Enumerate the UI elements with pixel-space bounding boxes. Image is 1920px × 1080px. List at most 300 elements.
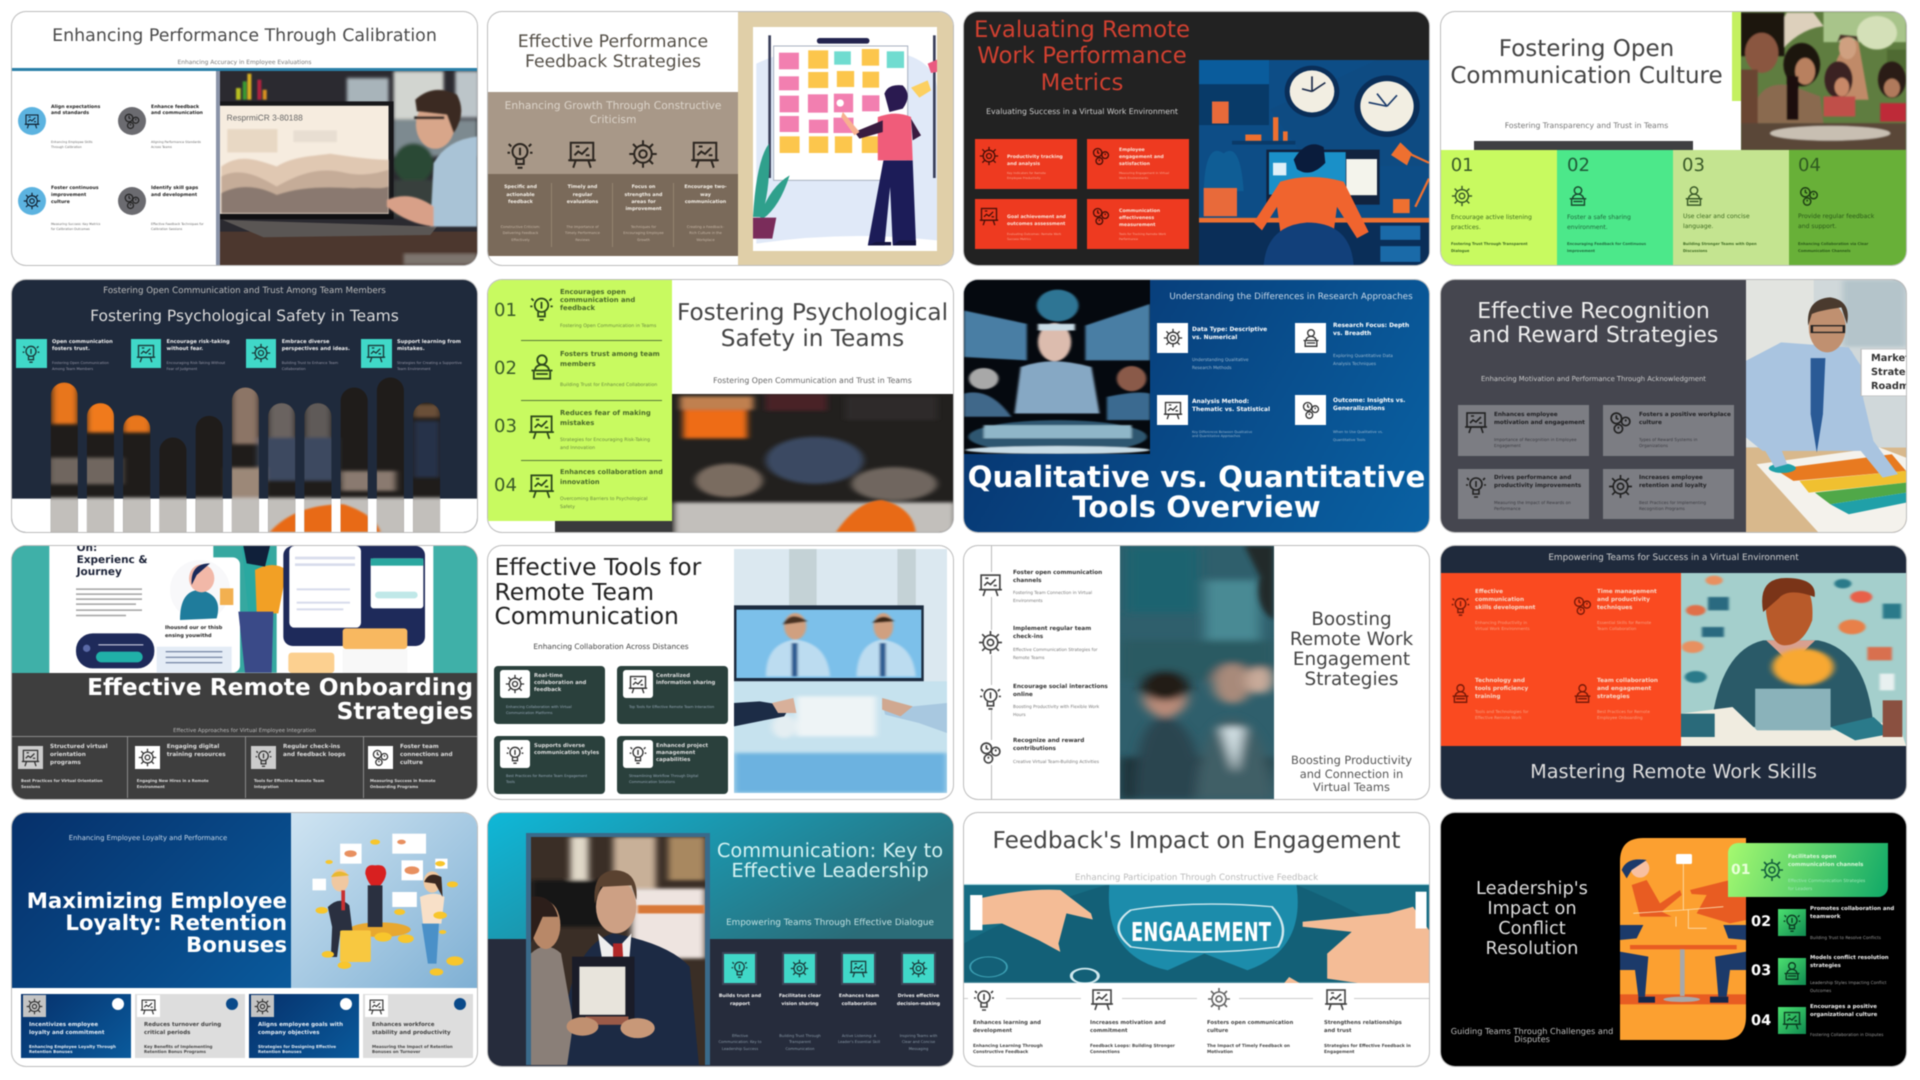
card: Communication Key to Effective Leadership — [488, 813, 953, 1066]
item: foster improvement — [17, 184, 101, 230]
item: enhance feedback: Across Teams — [151, 144, 172, 148]
item: orientation: programs — [50, 760, 81, 766]
item 04: 04 — [1751, 1013, 1771, 1029]
subtitle: Enhancing Employee Loyalty and Performance — [69, 834, 227, 842]
item: outcome — [1295, 395, 1425, 445]
card: Mastering Remote Work Skills — [1441, 546, 1906, 799]
column: 02: Foster a safe sharing — [1567, 214, 1631, 221]
title: Safety in Teams — [721, 325, 904, 352]
item: timely evaluations: regular — [573, 193, 592, 198]
item: enhance feedback: Aligning Performance Standards — [151, 140, 201, 144]
item: check-ins: Regular check-ins — [283, 744, 340, 750]
item: foster improvement: for Calibration Outcomes — [51, 226, 90, 230]
box: performance — [1458, 469, 1589, 519]
item 04: organizational culture — [1810, 1012, 1877, 1018]
item: analysis method: Analysis Method: — [1192, 399, 1249, 405]
card: workforce stability: Enhances workforce — [372, 1022, 434, 1028]
item 03: 03 — [494, 416, 517, 437]
icon — [246, 339, 276, 368]
subtitle: Fostering Open Communication and Trust Among Team Members — [103, 286, 386, 296]
icon: blue circle — [17, 106, 47, 136]
item: align expectations — [17, 104, 101, 149]
box: real-time: Real-time — [534, 672, 563, 678]
item: social interactions: online — [1013, 692, 1033, 698]
box: communication styles: Tools — [506, 780, 515, 784]
box: communication: Performance — [1119, 236, 1138, 240]
item: recognize contributions: Recognize and reward — [1013, 738, 1084, 744]
illustration caption: ensing youwithd — [165, 632, 212, 638]
title: Tools Overview — [1072, 490, 1321, 524]
item: open communication: Fostering Open Communication — [52, 361, 109, 365]
icon — [365, 995, 388, 1017]
title — [707, 841, 953, 882]
item: open communication: The Impact of Timely Feedback on — [1207, 1044, 1290, 1049]
item: data type: Research Methods — [1192, 366, 1231, 371]
box: retention — [1603, 469, 1734, 519]
column: 02: Improvement — [1567, 249, 1595, 253]
image: engagement hands — [964, 884, 1429, 983]
subtitle: Empowering Teams for Success in a Virtual Environment — [1548, 553, 1799, 563]
card: aligns goals: Aligns employee goals with — [258, 1022, 343, 1028]
box: retention: retention and loyalty — [1639, 482, 1707, 488]
box: retention: Recognition Programs — [1639, 506, 1685, 511]
box: culture — [1603, 405, 1734, 456]
item: trust: Effective — [732, 1034, 748, 1038]
item: social interactions: Boosting Productivity with Flexible Work — [1013, 705, 1099, 710]
icon — [18, 746, 43, 769]
card: Effective Tools for Remote Team Communication — [488, 546, 953, 799]
item: align expectations: and standards — [51, 111, 89, 116]
card: Fostering Psychological Safety (strips) — [12, 280, 477, 532]
icon — [530, 296, 554, 322]
box: engagement: engagement and — [1119, 155, 1164, 160]
box: motivation: Engagement — [1494, 443, 1521, 448]
card: incentivizes: Retention Bonuses — [29, 1048, 73, 1054]
item: strengths: Growth — [637, 238, 650, 242]
item 04: 04 — [494, 475, 517, 496]
card: incentivizes: Incentivizes employee — [29, 1022, 98, 1028]
item 03: Models conflict resolution — [1810, 955, 1889, 961]
item: time management: Essential Skills for Remote — [1597, 620, 1651, 625]
card: reduces turnover: Reduces turnover during — [144, 1022, 221, 1028]
item: open communication: Open communication — [52, 338, 113, 344]
icon — [1569, 186, 1587, 207]
image: award photo — [531, 837, 705, 1065]
item: motivation: Feedback Loops: Building Stronger — [1090, 1044, 1175, 1049]
item: communication skills: skills development — [1475, 605, 1535, 611]
item: enhance feedback: and communication — [151, 111, 203, 116]
icon — [1572, 595, 1593, 616]
item: team culture: Foster team — [400, 744, 439, 750]
item: open channels: Foster open communication — [1013, 570, 1102, 576]
title: Fostering Psychological Safety in Teams — [90, 307, 399, 325]
item: collaboration: Active Listening: A — [842, 1034, 876, 1038]
card: aligns goals: Retention Bonuses — [258, 1048, 302, 1054]
title: Communication — [494, 602, 679, 630]
icon — [1608, 410, 1633, 435]
item: foster improvement: culture — [51, 200, 70, 205]
box: goals — [975, 199, 1077, 249]
title: Metrics — [1041, 70, 1123, 96]
item: technology: training — [1475, 694, 1500, 700]
image: futuristic control room — [964, 280, 1150, 454]
box: engagement: Employee — [1119, 148, 1145, 153]
item: relationships: Strengthens relationships — [1324, 1020, 1402, 1026]
item 02: teamwork — [1810, 914, 1840, 920]
title: Feedback's Impact on Engagement — [993, 827, 1400, 854]
subtitle: Enhancing Collaboration Across Distances — [533, 642, 689, 651]
icon — [900, 952, 936, 985]
item 01: Encourages open — [560, 288, 626, 296]
item 03: and Innovation — [560, 446, 595, 451]
icon — [1450, 595, 1471, 616]
card: reduces turnover — [135, 994, 245, 1058]
item: strengths: Encouraging Employee — [623, 231, 664, 235]
item: outcome: Outcome: Insights vs. — [1333, 398, 1405, 404]
title: Fostering Psychological — [677, 299, 948, 326]
image: man with laptop: ResprmiCR 3-80188 — [227, 113, 303, 122]
title: Impact on — [1487, 898, 1577, 919]
subtitle: Enhancing Participation Through Constructive Feedback — [1075, 873, 1318, 883]
item: open communication — [15, 338, 114, 372]
item: relationships: and trust — [1324, 1028, 1352, 1034]
item: foster improvement: Foster continuous — [51, 186, 99, 191]
box: goals: Evaluating Outcomes: Remote Work — [1007, 232, 1061, 236]
column: 03: Use clear and concise — [1683, 213, 1750, 220]
box: motivation: Importance of Recognition in Employee — [1494, 437, 1577, 442]
item: analysis method: and Quantitative Approaches — [1192, 434, 1240, 438]
image: blurred meeting photo — [671, 393, 954, 533]
card: aligns goals — [249, 994, 359, 1058]
item: team culture — [368, 742, 474, 794]
icon — [979, 207, 999, 226]
title: and Reward Strategies — [1469, 323, 1718, 348]
item: vision: Facilitates clear — [779, 994, 821, 999]
box: performance: Drives performance and — [1494, 475, 1571, 481]
icon — [978, 684, 1003, 710]
subtitle: Enhancing Growth Through Constructive — [505, 99, 721, 112]
title: Enhancing Performance Through Calibration — [52, 26, 437, 46]
card: Boosting Remote Work Engagement Strategies — [964, 546, 1429, 799]
subtitle: and Connection in — [1300, 766, 1403, 780]
icon — [528, 472, 555, 499]
column: 04 — [1789, 150, 1906, 265]
item 03: Reduces fear of making — [560, 409, 651, 417]
icon: grey circle — [117, 106, 147, 136]
icon — [1572, 683, 1593, 704]
item: learning — [972, 987, 1084, 1057]
box: culture: Fosters a positive workplace — [1639, 412, 1731, 418]
box: retention: Best Practices for Implementing — [1639, 500, 1706, 505]
item: orientation: Structured virtual — [50, 744, 108, 750]
item: time management: Team Collaboration — [1597, 626, 1636, 631]
item 04 — [493, 468, 669, 513]
item: enhance feedback: Enhance feedback — [151, 105, 199, 110]
title: Strategies — [1305, 669, 1398, 690]
item: strengths: improvement — [625, 207, 662, 212]
item: team collaboration: Best Practices for Remote — [1597, 709, 1650, 714]
column: 01: practices. — [1451, 224, 1481, 230]
item: research focus: vs. Breadth — [1333, 331, 1371, 337]
item: analysis method: Thematic vs. Statistical — [1192, 407, 1270, 413]
box: motivation: motivation and engagement — [1494, 420, 1585, 426]
item: check-ins: Integration — [254, 784, 279, 789]
item: vision: vision sharing — [781, 1002, 819, 1007]
item: specific feedback: Constructive Criticism: — [501, 225, 540, 229]
item: two-way communication: Workplace — [696, 238, 715, 242]
box: engagement — [1087, 139, 1189, 189]
item: team culture: Measuring Success in Remote — [370, 778, 436, 783]
item: communication skills: Enhancing Productivity in — [1475, 620, 1527, 625]
box: communication: Tools for Tracking Remote Work — [1119, 232, 1166, 236]
title — [1441, 879, 1623, 959]
item: two-way communication: communication — [685, 200, 726, 205]
icon — [361, 339, 392, 368]
item: decision-making: Clear and Concise — [902, 1040, 935, 1044]
item: check-ins: Implement regular team — [1013, 626, 1091, 632]
box: performance: productivity improvements — [1494, 482, 1581, 488]
item: research focus: Research Focus: Depth — [1333, 323, 1409, 329]
item 01 card: Effective Communication Strategies — [1788, 879, 1865, 884]
card: Feedback's Impact on Engagement — [964, 813, 1429, 1066]
item: open channels: channels — [1013, 578, 1042, 584]
item: two-way communication: Creating a Feedback- — [687, 225, 724, 229]
divider bar — [12, 68, 477, 71]
item: open channels — [978, 570, 1114, 608]
card: Evaluating Remote Work Performance Metrics — [964, 12, 1429, 265]
item: motivation: Increases motivation and — [1090, 1020, 1166, 1026]
item: two-way communication — [684, 141, 727, 242]
item 03: mistakes — [560, 419, 594, 427]
subtitle: Fostering Transparency and Trust in Teams — [1505, 121, 1668, 130]
item: risk taking: Fear of Judgment — [166, 367, 197, 371]
box: goals: Success Metrics — [1007, 236, 1031, 240]
icon — [568, 141, 596, 168]
box: motivation — [1458, 405, 1589, 456]
item: social interactions: Hours — [1013, 713, 1026, 718]
column: 04: 04 — [1798, 155, 1821, 176]
subtitle: Disputes — [1514, 1034, 1550, 1044]
item 04: Enhances collaboration and — [560, 468, 663, 476]
item: specific feedback: Specific and — [504, 185, 537, 190]
item 01: feedback — [560, 304, 595, 312]
icon — [1464, 474, 1488, 498]
box: information sharing — [617, 666, 728, 724]
column: 01: Dialogue — [1451, 249, 1469, 253]
item: training: training resources — [167, 752, 226, 758]
box: culture: Types of Reward Systems in — [1639, 437, 1697, 442]
icon — [979, 146, 999, 166]
icon — [1092, 147, 1110, 166]
icon — [978, 572, 1003, 596]
item 01: 01 — [494, 300, 517, 321]
item: check-ins: Effective Communication Strategies for — [1013, 648, 1098, 653]
subtitle: Effective Approaches for Virtual Employee Integration — [173, 728, 316, 734]
item: decision-making: Inspiring Teams with — [900, 1034, 937, 1038]
card: incentivizes: loyalty and commitment — [29, 1030, 104, 1036]
panel: beige frame — [738, 12, 953, 265]
item: learning: Strategies for Creating a Supportive — [397, 361, 462, 365]
band: items — [488, 174, 738, 256]
column: 01: Encourage active listening — [1451, 214, 1532, 221]
item: social interactions: Encourage social interactions — [1013, 684, 1108, 690]
box: productivity — [975, 139, 1077, 189]
item 03: 03 — [1751, 963, 1771, 979]
icon — [1324, 987, 1348, 1011]
card: workforce stability — [363, 994, 473, 1058]
item: communication skills — [1450, 588, 1565, 636]
item: risk taking: Encourage risk-taking — [166, 338, 230, 344]
illustration caption — [165, 625, 222, 640]
card: Leadership's Impact on Conflict Resolution — [1441, 813, 1906, 1066]
panel: teal gradient — [488, 813, 953, 939]
item: check-ins: Remote Teams — [1013, 656, 1045, 661]
item: open channels: Environments — [1013, 599, 1043, 604]
image: meeting illustration — [1620, 838, 1746, 1040]
icon — [500, 740, 530, 768]
title: Engagement — [1293, 649, 1410, 670]
box: real-time: Enhancing Collaboration with Virtual — [506, 705, 572, 709]
item: outcome: Generalizations — [1333, 406, 1385, 412]
title: Mastering Remote Work Skills — [1530, 760, 1817, 783]
item: orientation: orientation — [50, 752, 86, 758]
illustration heading: Experienc & — [77, 554, 148, 566]
box: culture: Organizations — [1639, 443, 1668, 448]
box: information sharing: Top Tools for Effective Remote Team Interaction — [629, 705, 714, 709]
icon — [722, 952, 757, 985]
icon — [528, 413, 555, 440]
item: data type: vs. Numerical — [1192, 335, 1237, 341]
image: blurred business people — [1120, 546, 1274, 799]
item: enhance feedback — [117, 104, 204, 148]
title — [1450, 36, 1723, 89]
icon — [978, 740, 1003, 764]
item: team culture: Onboarding Programs — [370, 784, 418, 789]
item: strengths: strengths and — [625, 193, 662, 198]
icon — [251, 995, 274, 1017]
item: decision-making: decision-making — [897, 1002, 940, 1007]
item: two-way communication: Rich Culture in the — [689, 231, 722, 235]
column: 03: Discussions — [1683, 248, 1707, 252]
item 03 — [1751, 954, 1901, 994]
title: Qualitative vs. Quantitative — [968, 460, 1425, 494]
item 01 card: for Leaders — [1788, 887, 1812, 892]
item: open communication: fosters trust. — [52, 346, 90, 352]
panel: orange — [1441, 573, 1681, 746]
icon — [622, 670, 652, 698]
box: goals: outcomes assessment — [1007, 222, 1065, 227]
item: diverse perspectives — [245, 338, 350, 371]
item 02: Building Trust to Resolve Conflicts — [1810, 935, 1881, 940]
title — [518, 32, 708, 72]
item: training: Engaging New Hires in a Remote — [137, 778, 209, 783]
item: learning: mistakes. — [397, 346, 425, 352]
title — [12, 676, 473, 724]
box: project management: capabilities — [656, 756, 690, 762]
icon — [690, 141, 720, 168]
item: technology: Effective Remote Work — [1475, 715, 1522, 720]
card: Fostering Psychological Safety (green) — [488, 280, 953, 532]
icon — [368, 746, 393, 769]
item: decision-making — [890, 952, 948, 1056]
icon — [841, 952, 876, 985]
card: aligns goals: company objectives — [258, 1030, 320, 1036]
item: diverse perspectives: Embrace diverse — [282, 338, 329, 344]
item: check-ins — [978, 626, 1114, 664]
icon — [1778, 1007, 1806, 1034]
item: specific feedback: actionable — [506, 193, 535, 198]
item: timely evaluations: evaluations — [567, 200, 598, 205]
dark foot — [554, 521, 672, 532]
item: relationships: Strategies for Effective Feedback in — [1324, 1044, 1411, 1049]
board text — [1871, 352, 1920, 394]
box: motivation: Enhances employee — [1494, 412, 1558, 418]
title: Evaluating Remote — [974, 17, 1190, 43]
box: communication styles: Supports diverse — [534, 742, 585, 748]
item: check-ins: Tools for Effective Remote Team — [254, 778, 324, 783]
card: Effective Remote Onboarding Strategies — [12, 546, 477, 799]
illustration caption: Ihousnd our or thisb — [165, 625, 222, 631]
box: project management: Streamlining Workflow Through Digital — [629, 774, 698, 778]
icon — [628, 140, 658, 168]
column: 02 — [1557, 150, 1673, 265]
box: productivity: and analysis — [1007, 162, 1040, 167]
item: data type — [1157, 323, 1287, 375]
image: onboarding illustration — [12, 546, 477, 673]
item 01 card: Facilitates open — [1788, 854, 1836, 860]
icon — [1800, 186, 1818, 206]
card: Effective Recognition and Reward Strategies — [1441, 280, 1906, 532]
box: communication: measurement — [1119, 222, 1156, 228]
item: align expectations: Through Calibration — [51, 144, 82, 148]
box: project management: Communication Solutions — [629, 780, 675, 784]
item 02: members — [560, 360, 596, 368]
icon: blue circle — [17, 186, 47, 216]
icon — [251, 746, 276, 769]
item: specific feedback: Delivering Feedback — [503, 231, 538, 235]
icon — [137, 995, 160, 1017]
column: 01: Fostering Trust Through Transparent — [1451, 242, 1528, 246]
item: training: Engaging digital — [167, 744, 219, 750]
column: 04: and support. — [1798, 222, 1837, 230]
subtitle: Evaluating Success in a Virtual Work Environment — [986, 107, 1178, 116]
box: real-time — [494, 666, 605, 724]
item: collaboration: Leader's Essential Skill — [838, 1040, 880, 1044]
item: analysis method: Key Differences Between Qualitative — [1192, 430, 1252, 434]
box: project management: management — [656, 750, 695, 756]
item: skill gaps: Identify skill gaps — [151, 186, 198, 191]
item: team collaboration: strategies — [1597, 694, 1630, 700]
item: time management — [1572, 588, 1677, 636]
item: relationships — [1323, 987, 1429, 1057]
image: man with strategy map — [1746, 280, 1906, 532]
box: project management — [617, 736, 728, 794]
subtitle — [505, 99, 722, 126]
box: real-time: collaboration and — [534, 680, 586, 686]
column: 01: 01 — [1451, 155, 1474, 176]
icon — [1451, 185, 1473, 207]
item: timely evaluations: Timely and — [568, 185, 597, 190]
item: technology: tools proficiency — [1475, 686, 1528, 692]
column: 03: Building Stronger Teams with Open — [1683, 242, 1757, 246]
item: data type: Understanding Qualitative — [1192, 358, 1249, 363]
item: trust: rapport — [730, 1002, 750, 1007]
item: orientation: Best Practices for Virtual Orientation — [21, 778, 103, 783]
tab — [1732, 12, 1741, 101]
box: communication styles: Best Practices for Remote Team Engagement — [506, 774, 587, 778]
icon — [1090, 987, 1114, 1011]
item: open channels: Fostering Team Connection in Virtual — [1013, 591, 1092, 596]
